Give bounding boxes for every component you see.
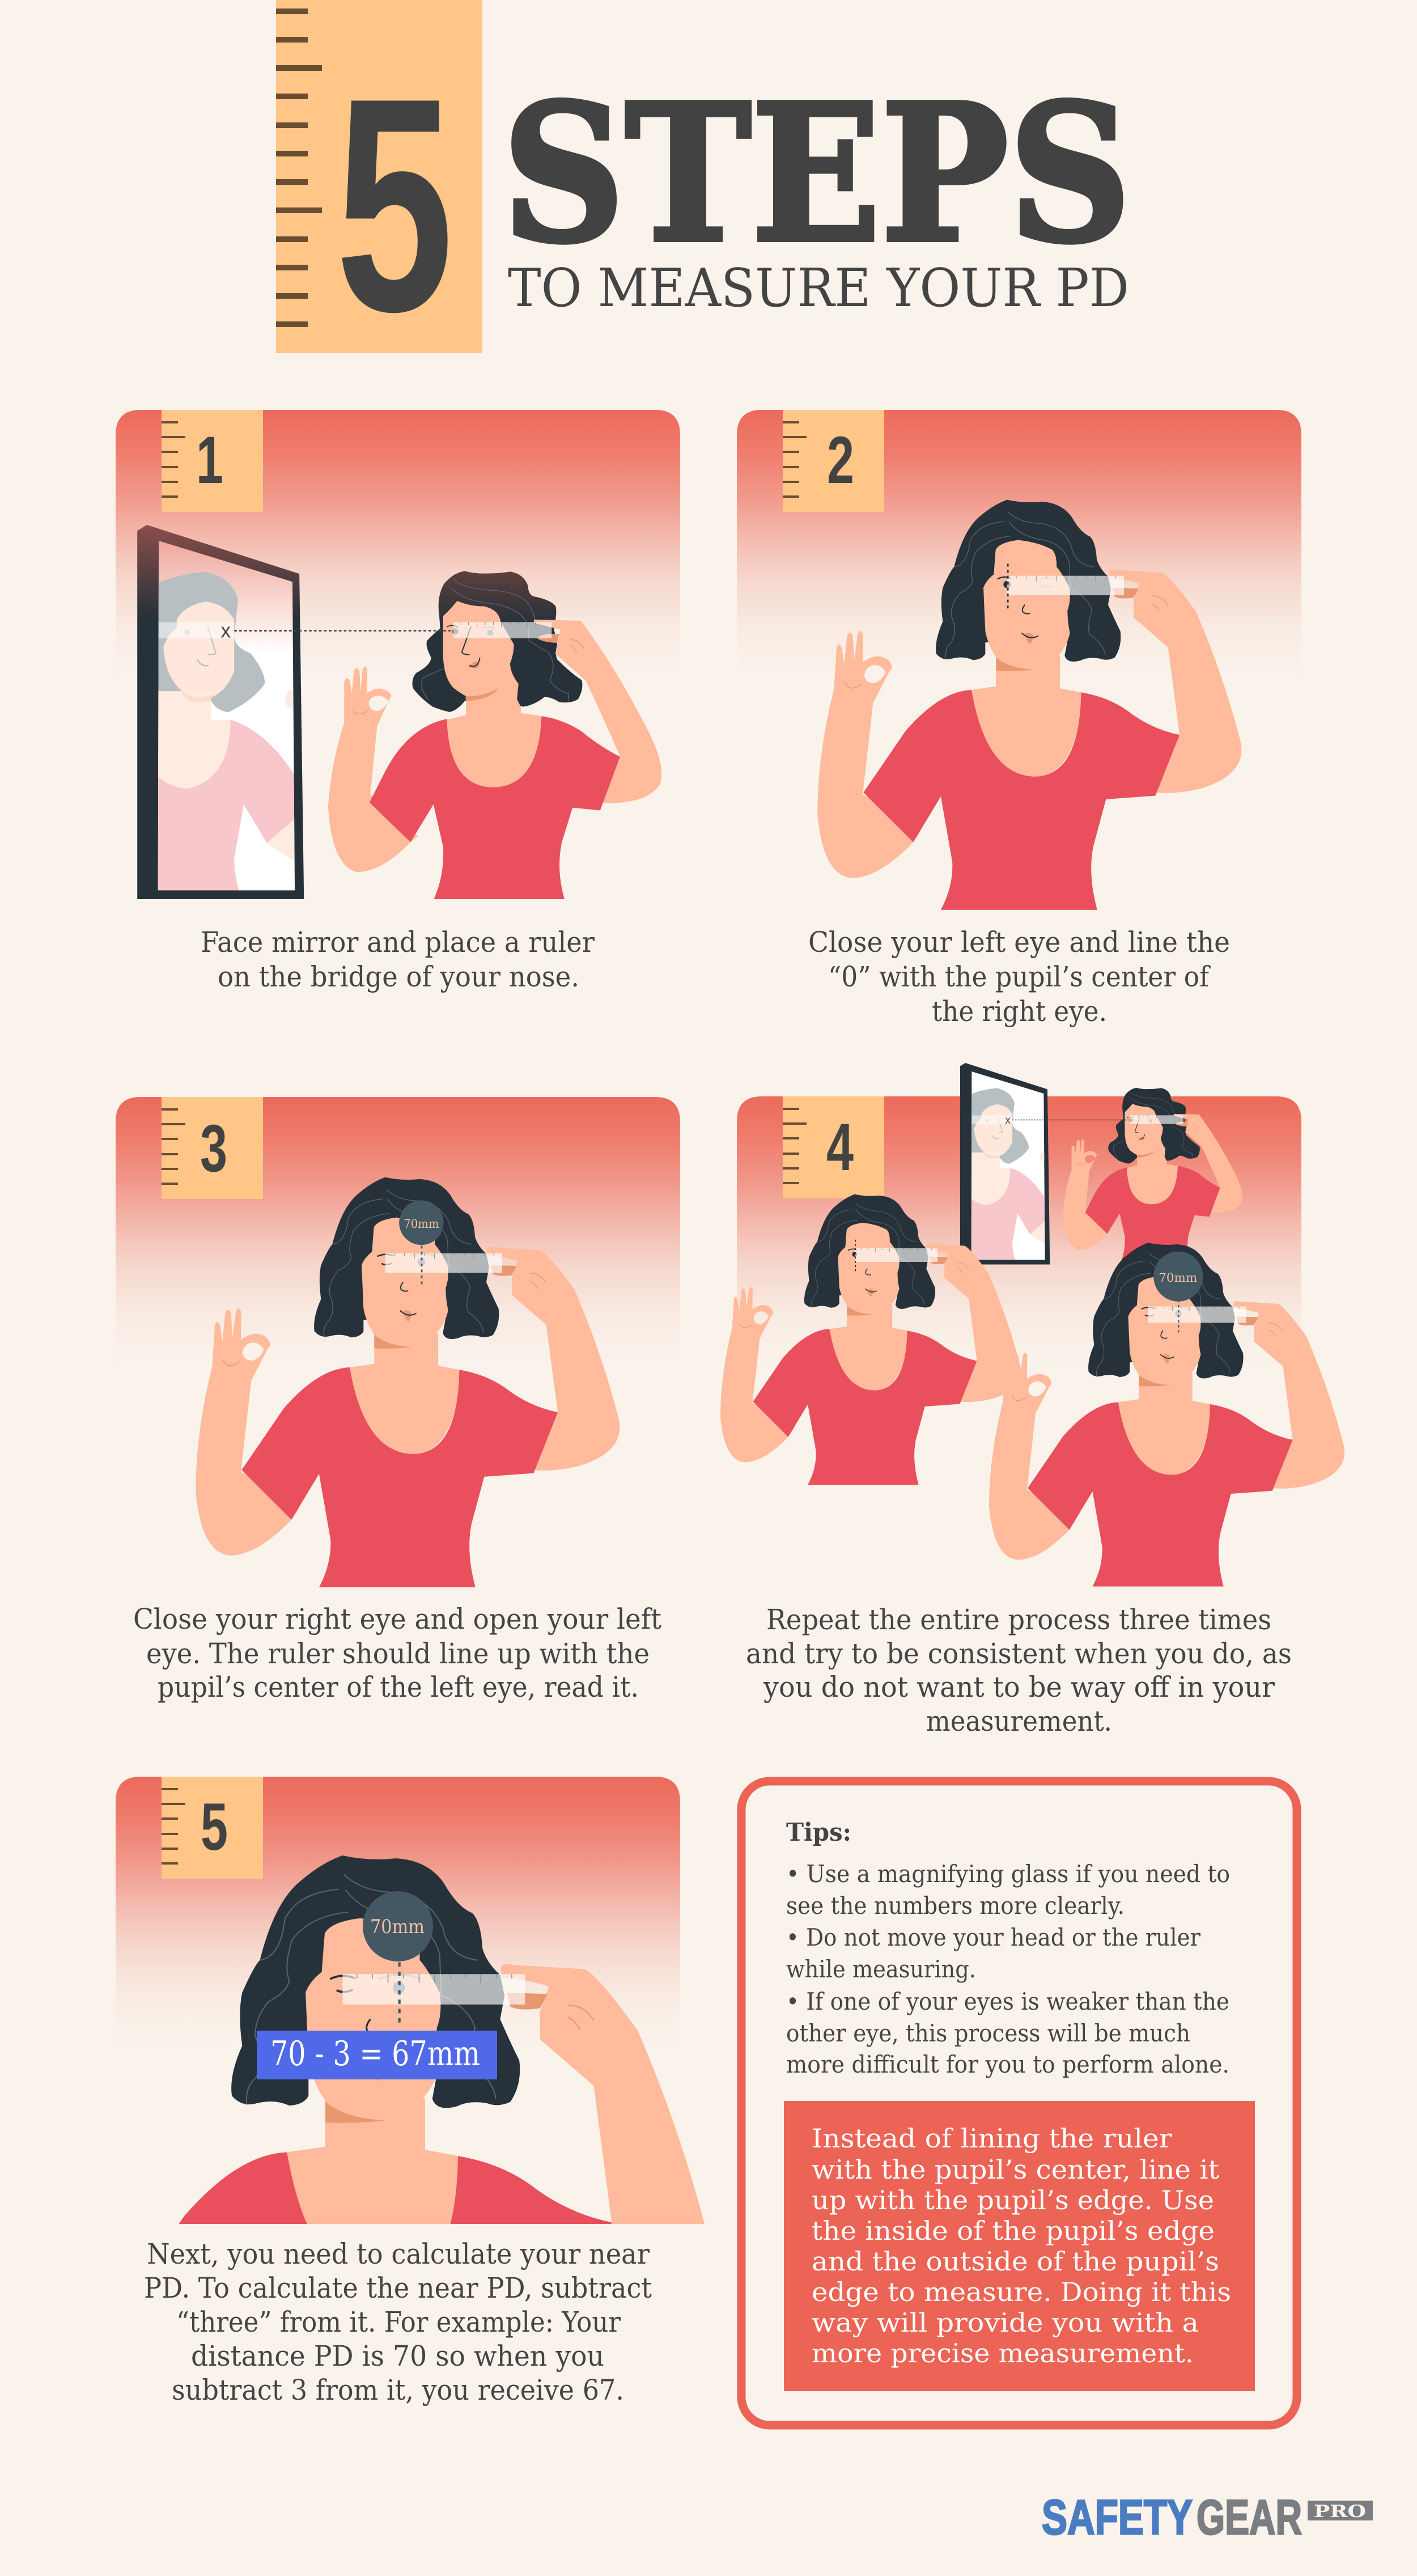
- step 3 number tab: 3: [200, 1111, 227, 1186]
- panel: step 3: [116, 1097, 680, 1704]
- step 3 illustration: woman reading ruler: 70mm: [404, 1217, 439, 1231]
- step 2 illustration: woman with ruler: [817, 500, 1241, 910]
- step 4 caption: measurement.: [926, 1705, 1112, 1738]
- step 5 number tab: [162, 1777, 263, 1879]
- tips border: [741, 1781, 1297, 2425]
- callout: pupil edge advice: edge to measure. Doing it this: [812, 2277, 1231, 2307]
- step 4 left woman: [720, 1194, 1021, 1485]
- step 4 gradient background: [737, 1096, 1301, 1368]
- step 2 number tab: [783, 410, 884, 512]
- step 5 illustration: close-up woman: [118, 1855, 708, 2496]
- step 2 caption: Close your left eye and line the: [808, 926, 1230, 959]
- step 1 illustration: mirror and woman: [137, 525, 661, 899]
- title ruler tab with number 5: 5: [336, 35, 453, 375]
- tips list: see the numbers more clearly.: [786, 1892, 1125, 1920]
- step 5 caption: “three” from it. For example: Your: [176, 2306, 621, 2338]
- step 1 caption: [201, 926, 595, 993]
- tips list: • Use a magnifying glass if you need to: [786, 1860, 1230, 1888]
- step 2 gradient background: [737, 410, 1301, 682]
- step 5 caption: distance PD is 70 so when you: [191, 2340, 604, 2372]
- tips list: • Do not move your head or the ruler: [786, 1923, 1201, 1951]
- step 2 caption: [808, 926, 1230, 1028]
- distance reading bubble: 70mm: [370, 1916, 425, 1938]
- callout: pupil edge advice: more precise measurement.: [812, 2338, 1194, 2369]
- step 5 number tab: 5: [201, 1790, 228, 1865]
- logo: Safety Gear Pro: PRO: [1314, 2502, 1366, 2522]
- panel: step 5: [116, 1777, 705, 2406]
- step 3 gradient background: [116, 1097, 680, 1369]
- callout: pupil edge advice: Instead of lining the ruler: [812, 2123, 1172, 2154]
- step 4 caption: Repeat the entire process three times: [766, 1603, 1271, 1636]
- step 1 number tab: 1: [196, 423, 223, 498]
- tips list: • If one of your eyes is weaker than the: [786, 1988, 1229, 2015]
- tips list: more difficult for you to perform alone.: [786, 2050, 1229, 2078]
- step 5 caption: Next, you need to calculate your near: [147, 2238, 650, 2270]
- step 5 caption: PD. To calculate the near PD, subtract: [144, 2272, 652, 2304]
- tips list: [786, 1860, 1230, 2078]
- step 3 caption: pupil’s center of the left eye, read it.: [158, 1671, 639, 1704]
- step 5 gradient background: [116, 1777, 680, 2049]
- step 2 number tab: 2: [827, 423, 854, 498]
- step 4 small mirror scene: [960, 1063, 1242, 1264]
- tips list: while measuring.: [786, 1955, 976, 1983]
- callout: pupil edge advice: up with the pupil’s edge. Use: [812, 2185, 1214, 2215]
- step 1 gradient background: [116, 410, 680, 682]
- step 3 caption: Close your right eye and open your left: [133, 1603, 661, 1636]
- step 1 caption: Face mirror and place a ruler: [201, 926, 595, 959]
- step 4 caption: you do not want to be way off in your: [763, 1671, 1275, 1704]
- step 1 number tab: [162, 410, 263, 512]
- step 5 caption: [144, 2238, 652, 2406]
- step 4 caption: [746, 1603, 1292, 1738]
- callout: pupil edge advice: with the pupil’s center, line it: [812, 2154, 1220, 2185]
- step 2 caption: the right eye.: [932, 995, 1107, 1028]
- tips heading: Tips:: [786, 1818, 851, 1847]
- step 5 caption: subtract 3 from it, you receive 67.: [172, 2374, 624, 2406]
- step 4 caption: and try to be consistent when you do, as: [746, 1637, 1292, 1670]
- panel: tips: [741, 1781, 1297, 2425]
- distance reading bubble: [363, 1891, 433, 1961]
- callout: pupil edge advice: the inside of the pupil’s edge: [812, 2215, 1215, 2246]
- step 4 front woman: [989, 1243, 1344, 1587]
- callout: pupil edge advice: [784, 2101, 1255, 2391]
- step 3 number tab: [162, 1097, 263, 1199]
- callout: pupil edge advice: way will provide you with a: [812, 2307, 1199, 2338]
- step 3 caption: eye. The ruler should line up with the: [146, 1637, 650, 1670]
- step 1 illustration: mirror and woman: x: [221, 619, 231, 642]
- step 3 caption: [133, 1603, 661, 1704]
- title: STEPS: STEPS: [502, 62, 1131, 285]
- step 4 number tab: 4: [826, 1110, 854, 1185]
- step 2 caption: “0” with the pupil’s center of: [828, 960, 1211, 993]
- logo: Safety Gear Pro: SAFETY: [1042, 2490, 1193, 2545]
- subtitle: TO MEASURE YOUR PD: [508, 257, 1129, 319]
- near PD formula bar: 70 - 3 = 67mm: [270, 2034, 480, 2074]
- callout: pupil edge advice: and the outside of the pupil’s: [812, 2246, 1219, 2277]
- panel: step 4: [720, 1063, 1344, 1738]
- step 4 number tab: [783, 1096, 884, 1198]
- step 4 small mirror scene: x: [1005, 1115, 1011, 1126]
- logo: Safety Gear Pro: GEAR: [1197, 2490, 1302, 2545]
- step 4 front woman: 70mm: [1159, 1271, 1198, 1285]
- panel: step 2: [737, 410, 1301, 1028]
- title ruler tab with number 5: [276, 0, 482, 375]
- tips list: other eye, this process will be much: [786, 2019, 1190, 2047]
- step 3 illustration: woman reading ruler: [196, 1177, 620, 1587]
- near PD formula bar: [257, 2031, 497, 2079]
- step 1 caption: on the bridge of your nose.: [218, 960, 579, 993]
- logo: Safety Gear Pro: [1042, 2490, 1373, 2545]
- panel: step 1: [116, 410, 680, 993]
